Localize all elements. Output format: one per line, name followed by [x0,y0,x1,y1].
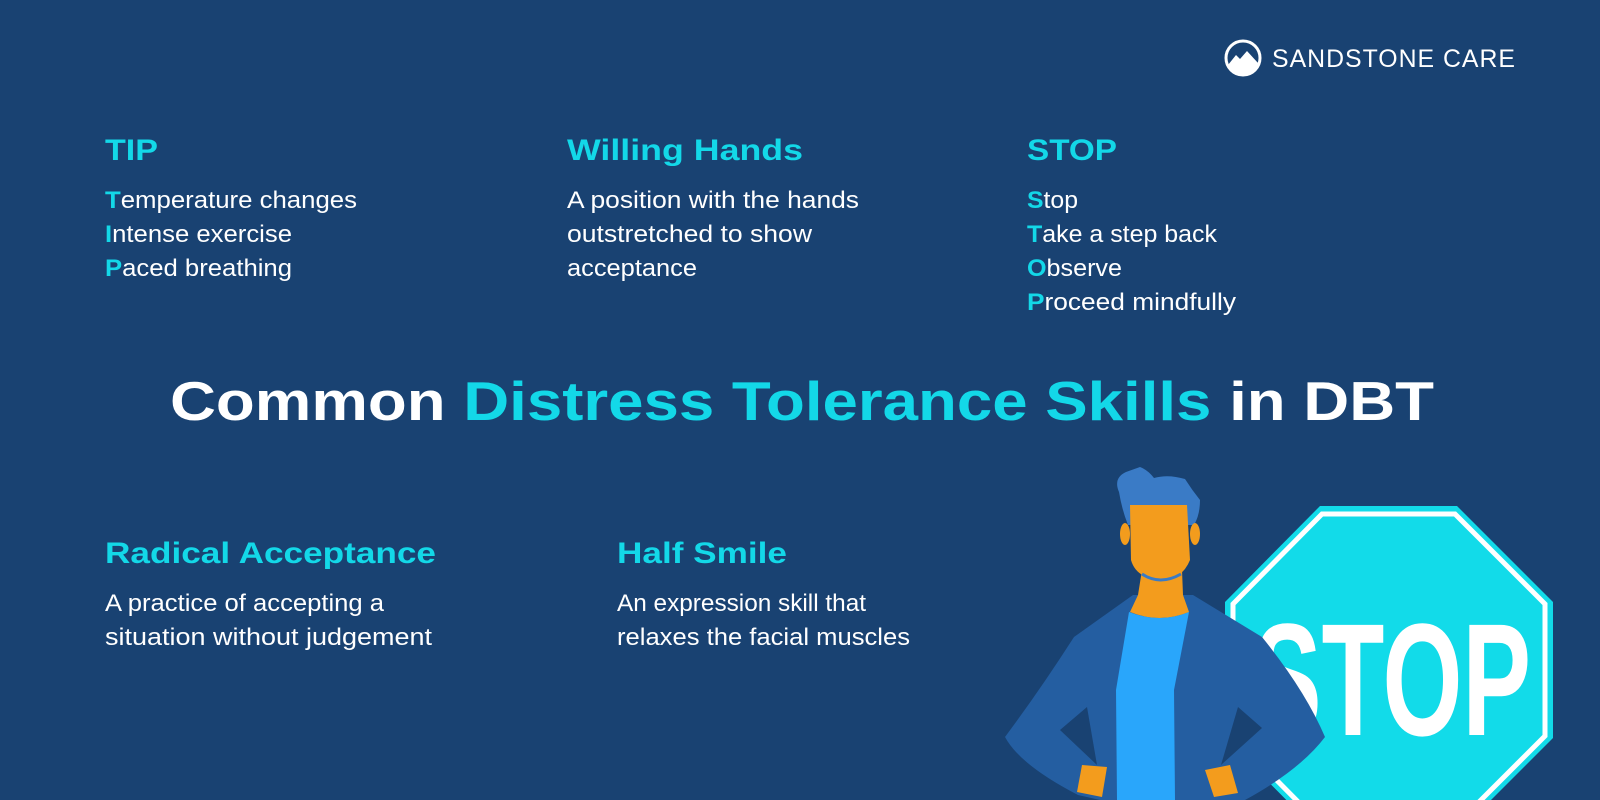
panel: Radical Acceptance [105,537,436,651]
panel: Willing Hands [567,134,859,282]
icon: person with hands on hips [1005,467,1325,800]
panel: Half Smile [617,537,910,651]
panel: Radical Acceptance: A practice of accepting a [105,590,385,617]
panel: Radical Acceptance: situation without judgement [105,624,432,651]
panel: TIP: TIP [105,134,158,167]
hair [1117,467,1200,525]
logo: Sandstone Care: SANDSTONE CARE [1272,45,1516,73]
panel: Half Smile: Half Smile [617,537,787,570]
title: Common Distress Tolerance Skills in DBT [170,370,1434,432]
panel: STOP: STOP [1027,134,1117,167]
panel: Radical Acceptance: Radical Acceptance [105,537,436,570]
panel: STOP: Stop [1027,187,1078,214]
shirt [1116,612,1189,800]
jacket [1005,595,1325,800]
panel: Half Smile: An expression skill that [617,590,866,617]
face [1130,505,1190,580]
panel: TIP [105,134,357,282]
panel: STOP [1027,134,1236,316]
logo: Sandstone Care [1226,41,1516,75]
panel: Willing Hands: A position with the hands [567,187,859,214]
panel: Willing Hands: outstretched to show [567,221,813,248]
panel: STOP: Take a step back [1027,221,1218,248]
inner gaps [1060,707,1097,765]
panel: TIP: Paced breathing [105,255,292,282]
icon: mountain circle [1226,41,1260,75]
panel: Half Smile: relaxes the facial muscles [617,624,910,651]
panel: TIP: Intense exercise [105,221,292,248]
icon: stop sign [1225,506,1553,800]
neck [1130,570,1189,618]
panel: STOP: Proceed mindfully [1027,289,1236,316]
panel: STOP: Observe [1027,255,1122,282]
ears [1120,523,1130,545]
hands [1077,765,1107,797]
panel: Willing Hands: Willing Hands [567,134,803,167]
panel: TIP: Temperature changes [105,187,357,214]
panel: Willing Hands: acceptance [567,255,697,282]
